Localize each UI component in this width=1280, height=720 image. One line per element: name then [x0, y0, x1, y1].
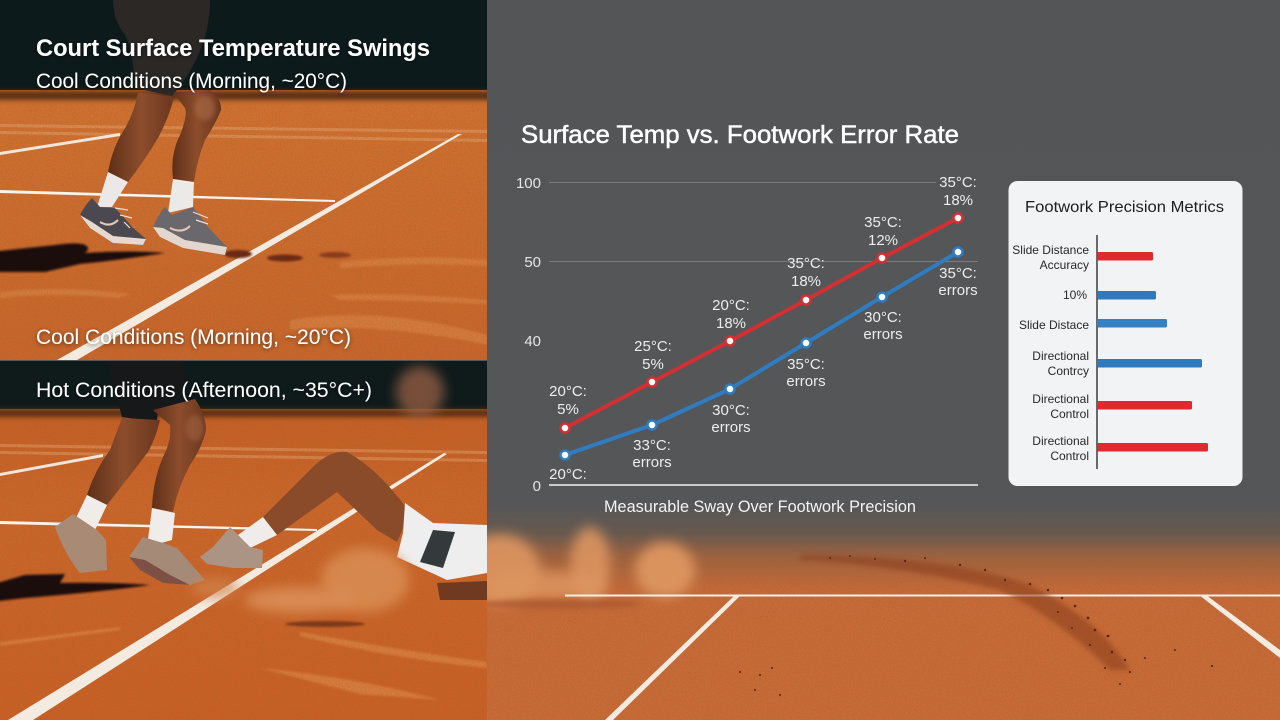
- panel heading: Footwork Precision Metrics: [1025, 199, 1224, 216]
- red point labels: 35°C:: [787, 255, 825, 272]
- bar labels: Accuracy: [1040, 258, 1089, 272]
- label: hot conditions: Hot Conditions (Afternoon, ~35°C+): [36, 378, 372, 402]
- y axis labels: [516, 175, 541, 495]
- chart caption: Measurable Sway Over Footwork Precision: [604, 497, 916, 516]
- bar labels: Directional: [1032, 349, 1089, 363]
- blue point labels: 35°C:: [939, 265, 977, 282]
- red point labels: 5%: [557, 401, 579, 418]
- label: cool conditions top: Cool Conditions (Morning, ~20°C): [36, 70, 347, 93]
- blue point labels: errors: [938, 282, 978, 299]
- blue point labels: errors: [632, 454, 672, 471]
- blue point labels: [549, 265, 978, 483]
- label: cool conditions bottom: Cool Conditions (Morning, ~20°C): [36, 325, 351, 349]
- y axis labels: 40: [524, 333, 541, 350]
- dark grain trail: [739, 555, 1213, 696]
- court lines: [565, 594, 1280, 720]
- bar labels: Slide Distace: [1019, 318, 1089, 332]
- bar axis: [1096, 235, 1098, 469]
- red point labels: 18%: [791, 273, 821, 290]
- red series: [560, 214, 962, 432]
- panel: cool conditions photo: [0, 0, 520, 360]
- red point labels: 20°C:: [712, 297, 750, 314]
- blue point labels: 30°C:: [712, 402, 750, 419]
- panel: chart background with clay court: [487, 516, 1280, 720]
- y axis labels: 100: [516, 175, 541, 192]
- panel: footwork precision metrics: [1008, 181, 1242, 486]
- blue point labels: errors: [786, 373, 826, 390]
- blue point labels: 20°C:: [549, 466, 587, 483]
- bar labels: Contrcy: [1048, 364, 1089, 378]
- player body, hot panel: [55, 399, 206, 585]
- sliding player, hot panel: [200, 452, 487, 600]
- red point labels: [549, 174, 977, 418]
- red point labels: 35°C:: [939, 174, 977, 191]
- bar labels: Control: [1050, 407, 1089, 421]
- bar labels: Slide Distance: [1012, 243, 1089, 257]
- blue point labels: 33°C:: [633, 437, 671, 454]
- blue point labels: errors: [711, 419, 751, 436]
- blue point labels: 30°C:: [864, 309, 902, 326]
- blue point labels: errors: [863, 326, 903, 343]
- y axis labels: 50: [524, 254, 541, 271]
- red point labels: 20°C:: [549, 383, 587, 400]
- dust plume: [460, 527, 695, 609]
- bars: [1097, 252, 1208, 452]
- dust cloud, hot panel: [191, 548, 409, 627]
- bar labels: Control: [1050, 449, 1089, 463]
- blue series: [560, 248, 962, 460]
- bar labels: [1012, 243, 1089, 463]
- chart heading: Surface Temp vs. Footwork Error Rate: [521, 121, 959, 149]
- bar labels: 10%: [1063, 288, 1087, 302]
- panel: hot conditions photo: [0, 350, 520, 720]
- blue point labels: 35°C:: [787, 356, 825, 373]
- red point labels: 18%: [716, 315, 746, 332]
- red point labels: 18%: [943, 192, 973, 209]
- bar labels: Directional: [1032, 392, 1089, 406]
- player body, cool panel: [80, 0, 227, 255]
- red point labels: 5%: [642, 356, 664, 373]
- line chart: [516, 174, 978, 495]
- title: Court Surface Temperature Swings: [36, 35, 430, 62]
- red point labels: 12%: [868, 232, 898, 249]
- y axis labels: 0: [533, 478, 541, 495]
- bar labels: Directional: [1032, 434, 1089, 448]
- red point labels: 25°C:: [634, 338, 672, 355]
- red point labels: 35°C:: [864, 214, 902, 231]
